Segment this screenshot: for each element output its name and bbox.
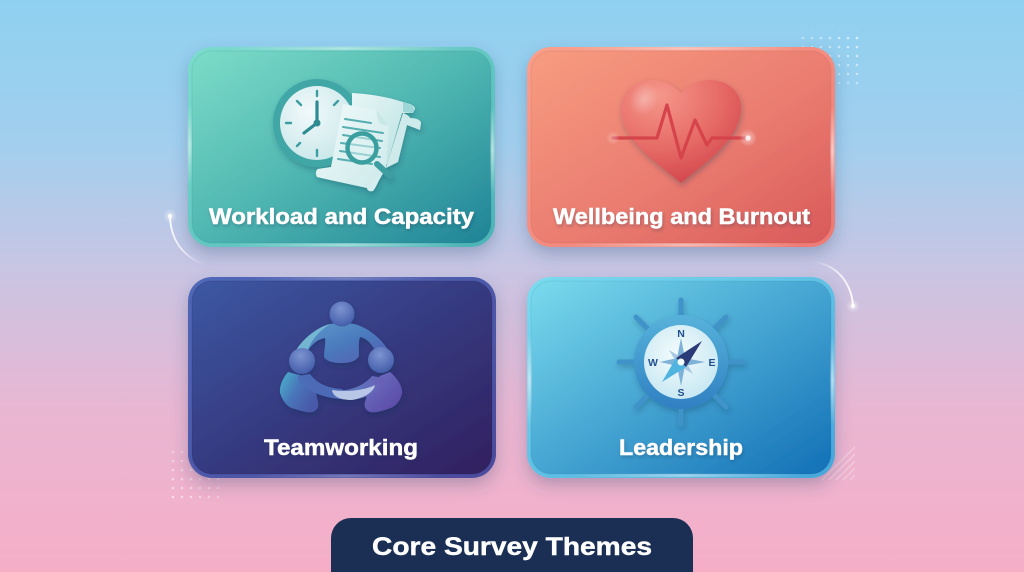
label: Wellbeing and Burnout: Wellbeing and Burnout (553, 204, 811, 229)
panel: Teamworking (188, 277, 496, 478)
card frame (527, 47, 835, 247)
compass letters (648, 328, 716, 399)
icon: heart with pulse line (606, 78, 757, 183)
decoration: dot grid bottom left (172, 450, 220, 498)
compass star (660, 338, 705, 386)
arrow: right curved connector (813, 262, 860, 313)
label: Workload and Capacity: Workload and Capacity (209, 204, 475, 229)
compass letters: N (677, 328, 685, 340)
decoration: hatch bottom right (820, 446, 855, 480)
panel: Wellbeing and Burnout (527, 47, 835, 247)
label: Leadership: Leadership (619, 435, 743, 460)
panel: Leadership (527, 277, 835, 478)
compass letters: W (648, 357, 658, 369)
compass letters: E (708, 357, 716, 369)
card frame (188, 47, 495, 247)
icon: three people in a circle (280, 302, 402, 412)
icon: clock and document with magnifier (273, 79, 421, 191)
decoration: dot grid top right (802, 30, 858, 84)
arrow: left curved connector (163, 209, 207, 265)
label: Teamworking: Teamworking (264, 435, 418, 460)
compass letters: S (677, 387, 685, 399)
title text: Core Survey Themes (372, 533, 652, 561)
icon: compass ship wheel (619, 300, 743, 424)
title banner (331, 518, 693, 572)
card frame (527, 277, 835, 478)
card frame (188, 277, 496, 478)
panel: Workload and Capacity (188, 47, 495, 247)
